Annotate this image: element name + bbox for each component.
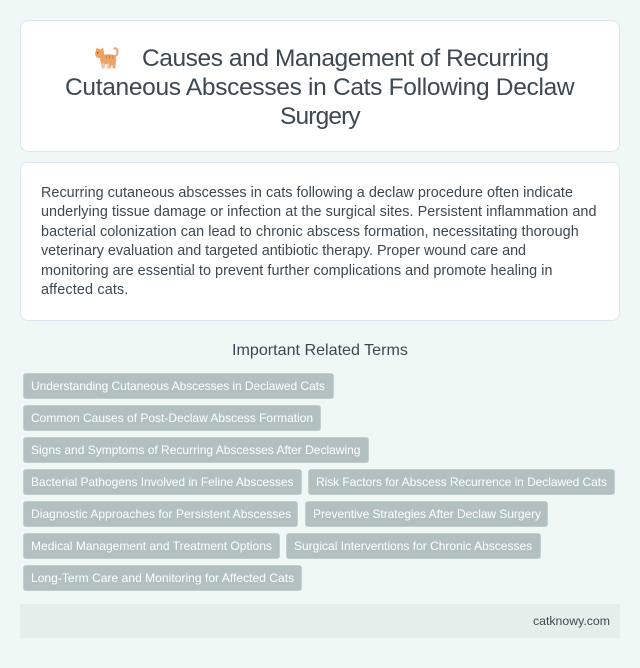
panel: summary card — [20, 162, 620, 321]
tag: Common Causes of Post-Declaw Abscess Formation — [31, 411, 313, 425]
summary paragraph: monitoring are essential to prevent further complications and promote healing in — [41, 263, 553, 279]
footer bar — [20, 604, 620, 638]
tag: Preventive Strategies After Declaw Surgery — [313, 507, 541, 521]
tag — [23, 565, 302, 591]
summary paragraph: bacterial colonization can lead to chronic abscess formation, necessitating thorough — [41, 224, 579, 240]
tag — [286, 533, 541, 559]
tag — [305, 501, 548, 527]
tag — [23, 373, 334, 399]
title text — [65, 45, 575, 130]
tag: Understanding Cutaneous Abscesses in Declawed Cats — [31, 379, 325, 393]
panel: title card — [20, 20, 620, 152]
tag: Risk Factors for Abscess Recurrence in Declawed Cats — [316, 475, 607, 489]
term tags — [23, 373, 615, 591]
tag: Medical Management and Treatment Options — [31, 539, 272, 553]
tag: Bacterial Pathogens Involved in Feline Abscesses — [31, 475, 293, 489]
summary paragraph: affected cats. — [41, 282, 129, 298]
tag — [23, 437, 369, 463]
tag — [23, 469, 302, 495]
title text: Surgery — [280, 103, 360, 130]
tag: Surgical Interventions for Chronic Abscesses — [294, 539, 532, 553]
footer source text: catknowy.com — [533, 614, 610, 628]
summary paragraph — [41, 185, 597, 298]
tag: Diagnostic Approaches for Persistent Abscesses — [31, 507, 291, 521]
heading: important related terms: Important Related Terms — [232, 341, 408, 359]
tag: Signs and Symptoms of Recurring Abscesses After Declawing — [31, 443, 360, 457]
tag: Long-Term Care and Monitoring for Affected Cats — [31, 571, 294, 585]
tag — [308, 469, 615, 495]
tag — [23, 501, 298, 527]
tag — [23, 533, 280, 559]
summary paragraph: Recurring cutaneous abscesses in cats following a declaw procedure often indicate — [41, 185, 573, 201]
title text: Cutaneous Abscesses in Cats Following Declaw — [65, 74, 574, 101]
title text: Causes and Management of Recurring — [142, 45, 549, 72]
tag — [23, 405, 321, 431]
summary paragraph: veterinary evaluation and targeted antibiotic therapy. Proper wound care and — [41, 243, 526, 259]
summary paragraph: underlying tissue damage or infection at the surgical sites. Persistent inflammation and — [41, 204, 597, 220]
icon: cat — [95, 47, 118, 68]
